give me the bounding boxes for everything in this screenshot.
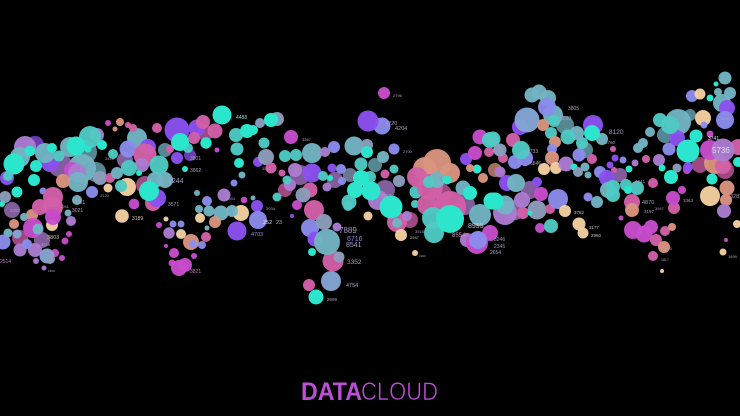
number labels: 1900 <box>419 254 426 258</box>
number labels: 5736 <box>712 146 730 155</box>
bubble cluster: upper right of centre <box>486 84 626 238</box>
number labels: 3518 <box>415 229 425 234</box>
logo: DATACLOUD: CLOUD <box>361 378 438 406</box>
number labels: 3803 <box>47 235 59 241</box>
number labels: 1817 <box>661 258 669 262</box>
number labels: 3142 <box>430 220 440 225</box>
number labels: 3043 <box>226 196 236 201</box>
number labels: 1568 <box>48 269 55 273</box>
number labels: 3760 <box>605 140 616 145</box>
number labels: 2015 <box>663 246 673 251</box>
number labels: 3196 <box>720 116 730 121</box>
number labels: 3775 <box>570 128 581 133</box>
number labels: 4204 <box>395 126 407 132</box>
number labels: 6846 <box>530 161 541 167</box>
number labels: 3947 <box>655 206 665 211</box>
background filler bubbles <box>4 109 734 248</box>
number labels: 2947 <box>410 235 420 240</box>
number labels: 4341 <box>635 179 646 184</box>
number labels: 3367 <box>302 137 312 142</box>
number labels: 3363 <box>683 198 694 203</box>
number labels: 8995 <box>468 223 484 230</box>
number labels: 3805 <box>568 106 579 112</box>
number labels: 1733 <box>527 149 538 155</box>
number labels: 4870 <box>642 200 654 206</box>
number labels: 2345 <box>494 244 505 250</box>
number labels: 3177 <box>589 225 600 230</box>
number labels: 23 <box>276 220 282 226</box>
number labels: 252 <box>263 220 272 226</box>
number labels: 3352 <box>347 259 362 266</box>
number labels: 3142 <box>380 194 391 200</box>
number labels: 3197 <box>644 209 655 214</box>
number labels: 3818 <box>41 242 51 247</box>
number labels: 6716 <box>347 236 363 243</box>
number labels: 4220 <box>385 121 397 127</box>
bubble cluster: central column <box>248 87 390 304</box>
number labels: 1899 <box>728 254 738 259</box>
number labels: 8244 <box>168 178 184 185</box>
number labels: 3599 <box>327 297 338 302</box>
bubble cluster: far left <box>0 136 76 270</box>
number labels: 3021 <box>72 208 83 214</box>
bubble cluster: centre <box>328 136 422 256</box>
number labels: 3512 <box>262 166 272 171</box>
number labels: 2700 <box>403 149 413 154</box>
number labels: 3189 <box>132 216 143 222</box>
number labels: 2120 <box>100 193 110 198</box>
number labels: 3662 <box>190 168 201 174</box>
number labels: 2514 <box>0 259 11 265</box>
number labels: 2796 <box>393 93 403 98</box>
number labels: 3246 <box>494 237 505 243</box>
number labels: 8554 <box>452 233 466 239</box>
number labels: 3034 <box>266 206 276 211</box>
number labels: 3261 <box>74 200 85 206</box>
bubble cluster: right of centre <box>407 130 503 254</box>
number labels: 4754 <box>346 283 358 289</box>
bubble cluster: left centre <box>47 118 188 223</box>
number labels: 3571 <box>168 202 179 208</box>
number labels: 1261 <box>60 204 70 209</box>
number labels: 7889 <box>339 226 357 235</box>
number labels: 4488 <box>236 115 247 121</box>
number labels: 3262 <box>10 208 21 213</box>
number labels: 3416 <box>105 156 115 161</box>
number labels: 3801 <box>190 156 201 162</box>
number labels: 8120 <box>609 129 624 136</box>
logo: DATACLOUD: DATA <box>301 378 362 406</box>
number labels: 3782 <box>574 210 585 215</box>
bubble cluster: right middle <box>599 138 686 273</box>
logo: DATACLOUD <box>301 378 438 406</box>
number labels: 3821 <box>190 269 201 275</box>
bubble cluster: lower left <box>156 188 249 276</box>
number labels: 8541 <box>346 242 362 249</box>
number labels: 2960 <box>591 233 602 238</box>
bubble cluster: upper middle left <box>152 106 254 186</box>
number labels <box>0 93 740 302</box>
number labels: 2654 <box>490 250 501 256</box>
bubble cluster: far right <box>645 72 740 256</box>
number labels: 3330 <box>560 116 571 122</box>
number labels: 4703 <box>251 232 263 238</box>
number labels: 3741 <box>708 136 719 142</box>
